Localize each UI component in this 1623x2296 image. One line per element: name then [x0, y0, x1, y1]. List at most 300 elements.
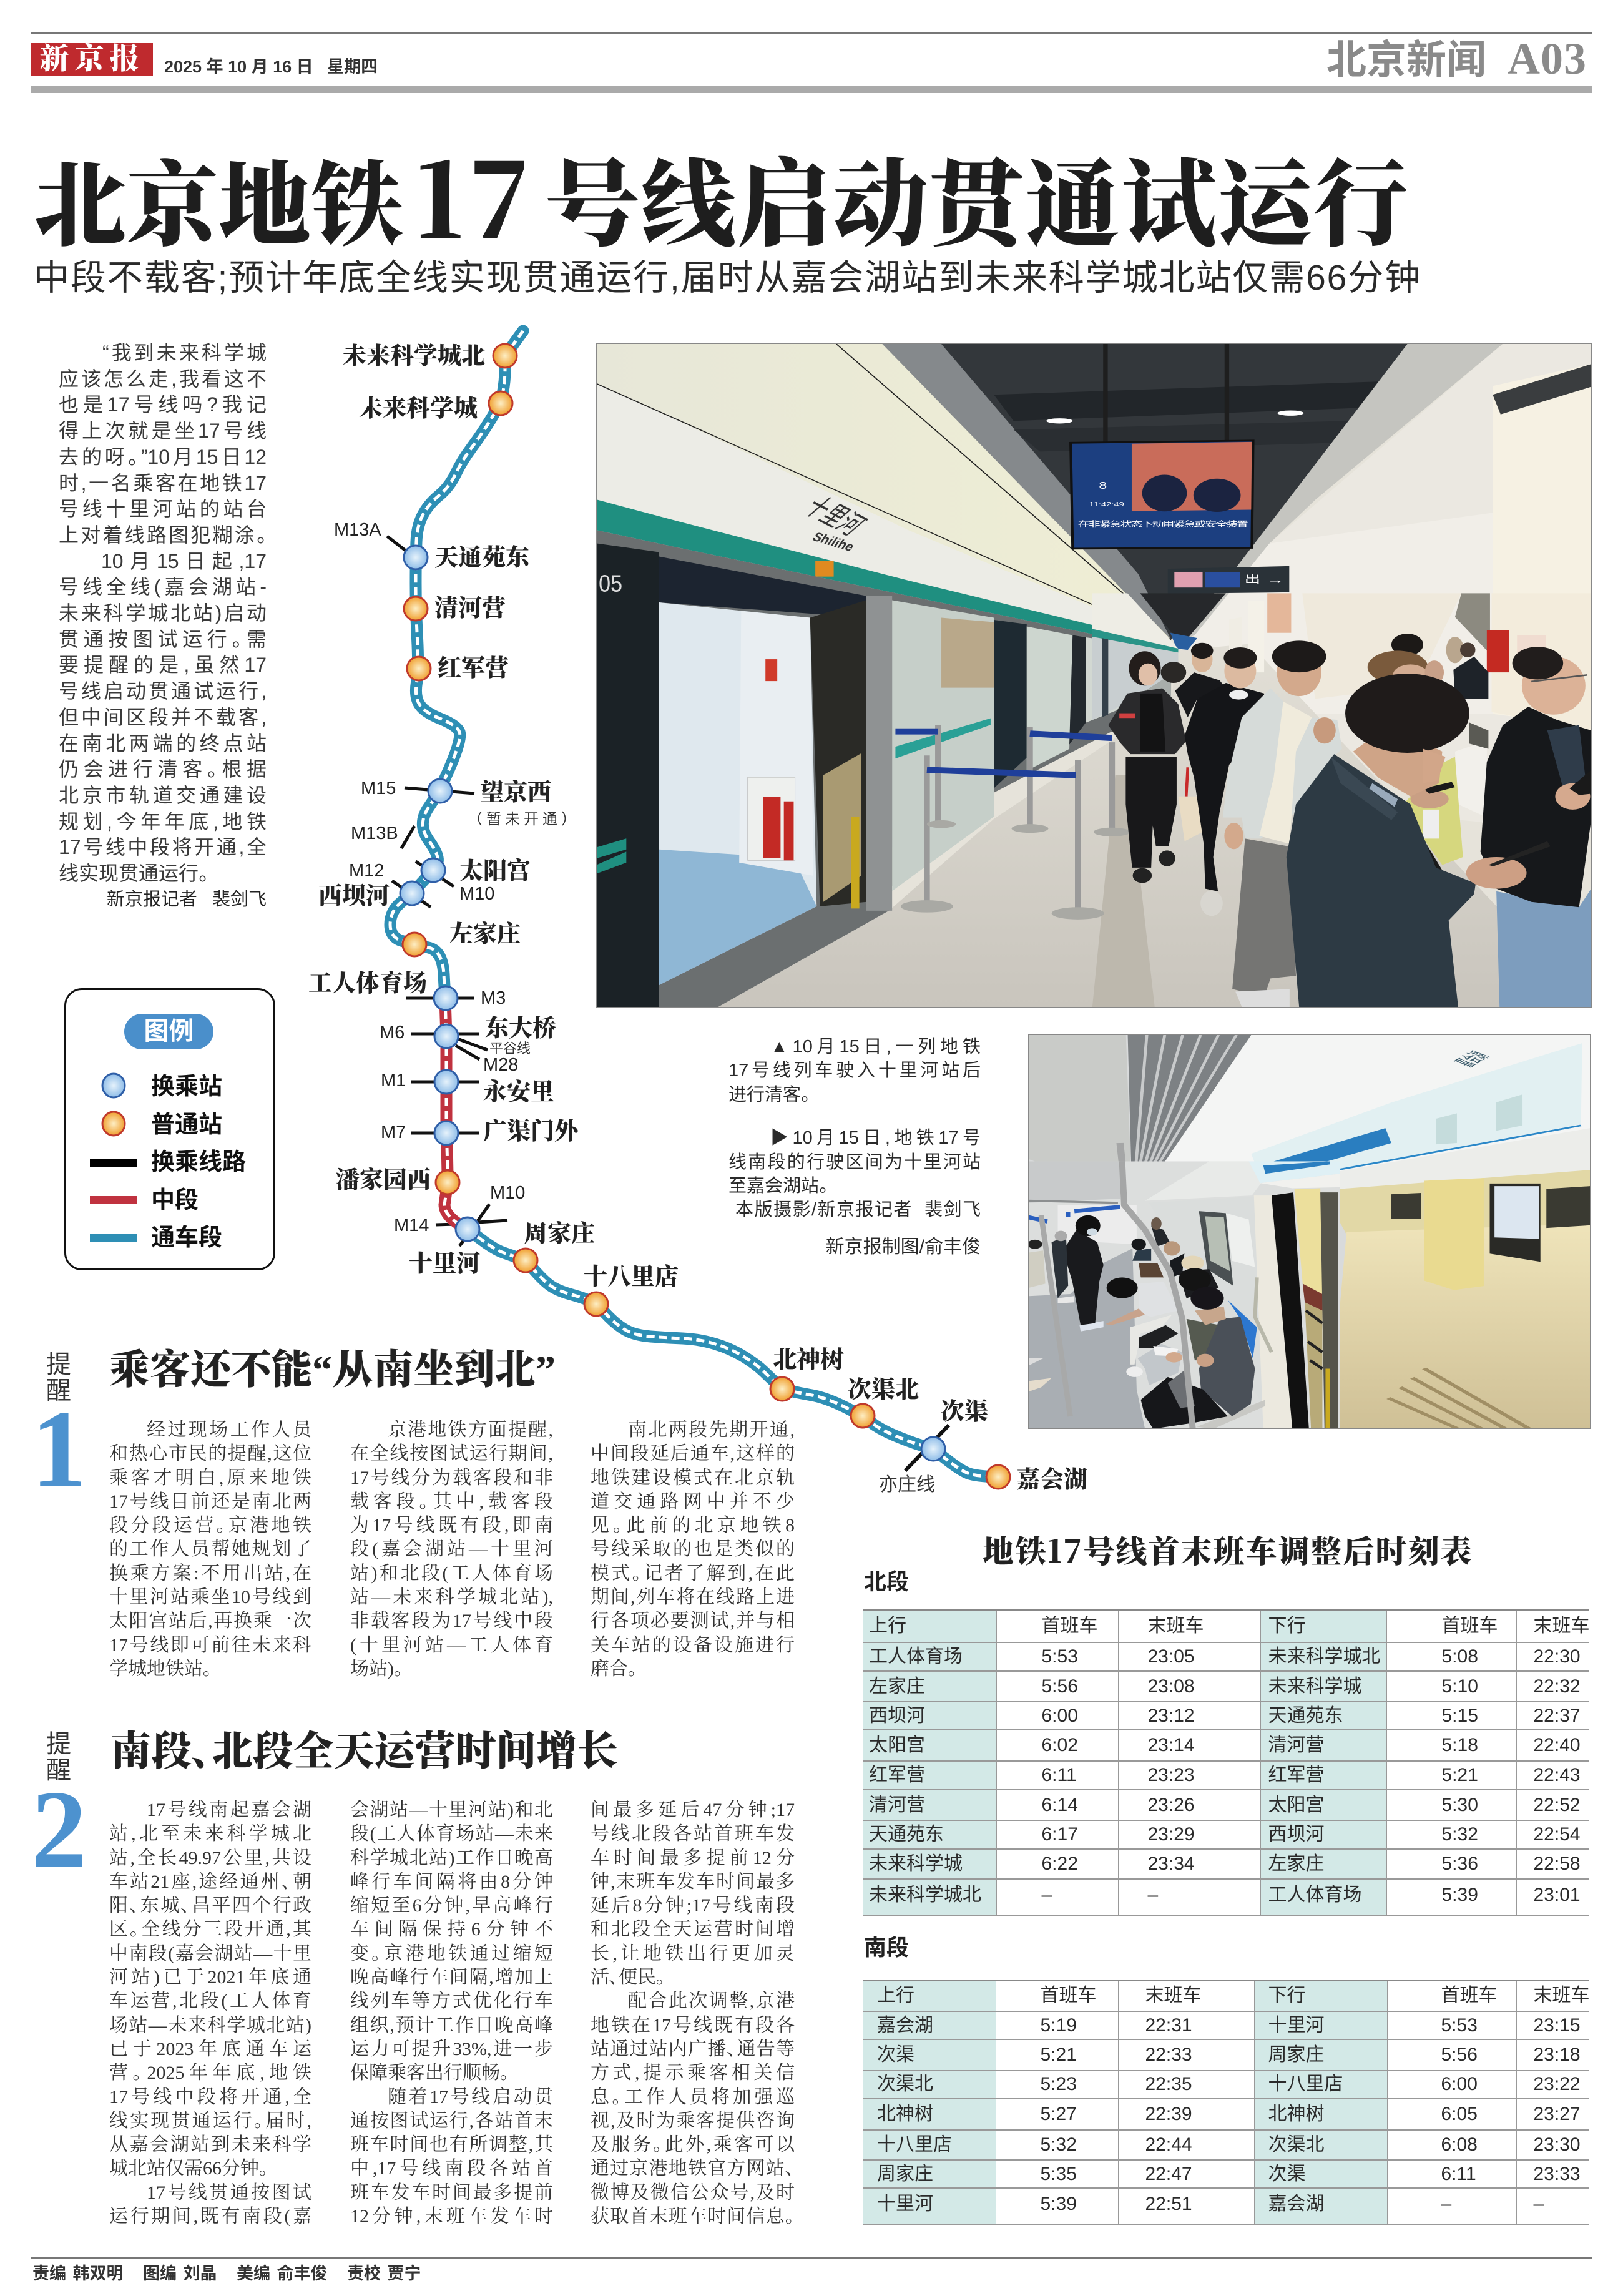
reminder 1 column 1: 17号线目前还是南北两: [109, 1491, 311, 1512]
reminder 1 column 3: 中间段延后通车,这样的: [591, 1443, 795, 1464]
south section timetable: 5:19: [1040, 2015, 1077, 2035]
station wall: 十里河: [795, 487, 878, 542]
carriage interior: [1029, 1161, 1340, 1428]
footer credits: 责编 韩双明 图编 刘晶 美编 俞丰俊 责校 贾宁: [32, 2264, 421, 2283]
standing passenger: [1063, 1215, 1104, 1332]
north section timetable: 6:02: [1041, 1735, 1078, 1755]
north section timetable: 22:30: [1533, 1646, 1581, 1667]
information screen: 11:42:49: [1089, 501, 1124, 508]
south section timetable: 6:00: [1441, 2074, 1478, 2094]
intro text block: 新京报记者 裴剑飞: [107, 890, 267, 910]
line labels: M10: [490, 1183, 525, 1203]
north section timetable: 5:53: [1041, 1646, 1078, 1667]
reminder 2 column 3: 配合此次调整,京港: [628, 1991, 795, 2011]
reminder 2 column 1: 17号线贯通按图试: [147, 2182, 311, 2203]
station names: 东大桥: [485, 1016, 556, 1042]
reminder 1 column 3: [591, 1420, 795, 1679]
south section timetable: 次渠: [877, 2044, 914, 2065]
reminder 2 column 2: 班车时间也有所调整,其: [350, 2134, 553, 2155]
platform view: [1323, 1170, 1590, 1428]
south section timetable: 5:27: [1040, 2104, 1077, 2124]
route display: [1251, 1043, 1582, 1184]
reminder 2 column 2: 车间隔保持6分钟不: [350, 1919, 553, 1940]
date line: 2025 年 10 月 16 日 星期四: [164, 57, 378, 76]
reminder 2 column 1: 区。全线分三段开通,其: [109, 1919, 311, 1940]
station names: 嘉会湖: [1016, 1467, 1087, 1493]
north section timetable: 5:30: [1442, 1794, 1478, 1815]
station names: 周家庄: [524, 1220, 595, 1247]
right wall and column: [1184, 344, 1591, 832]
legend labels: 换乘线路: [151, 1149, 246, 1175]
north section timetable: 末班车: [1147, 1616, 1204, 1636]
man behind: [1175, 643, 1226, 717]
north section timetable: 22:40: [1533, 1735, 1581, 1755]
reminder 2 column 2: 12分钟,末班车发车时: [350, 2206, 553, 2227]
regular stations: [403, 344, 1010, 1489]
reminder 2 column 3: 钟,末班车发车时间最多: [591, 1872, 795, 1892]
north section timetable: 22:32: [1533, 1675, 1581, 1697]
south section timetable: 23:22: [1533, 2074, 1581, 2094]
south section timetable: [863, 1980, 1589, 2225]
transfer stations: [400, 546, 945, 1461]
reminder 2 column 1: 营。2025年年底,地铁: [109, 2063, 311, 2083]
north section timetable: 5:18: [1442, 1735, 1478, 1755]
reminder 2 column 1: 中南段(嘉会湖站—十里: [109, 1943, 311, 1964]
south section timetable: 5:35: [1040, 2164, 1077, 2184]
north section timetable: 23:01: [1533, 1885, 1581, 1905]
north section timetable: 未来科学城北: [1268, 1646, 1381, 1667]
north section timetable: 6:00: [1041, 1705, 1078, 1725]
station names: 未来科学城: [359, 396, 478, 422]
reminder 1 column 3: 地铁建设模式在北京轨: [591, 1468, 795, 1488]
south section timetable: –: [1533, 2194, 1544, 2214]
woman in leather jacket: [1108, 651, 1186, 883]
exit sign: 出: [1245, 571, 1260, 586]
intro text block: 但中间区段并不载客,: [59, 706, 267, 729]
reminder 2 column 3: 和北段全天运营时间增: [591, 1919, 795, 1940]
south section timetable: 6:08: [1441, 2134, 1478, 2155]
reminder 1 column 2: 段(嘉会湖站—十里河: [350, 1539, 553, 1559]
footer rule: [31, 2257, 1592, 2259]
south section timetable: 十八里店: [877, 2134, 952, 2155]
south section timetable: 首班车: [1040, 1985, 1096, 2006]
intro text block: 号线十里河站的站台: [59, 498, 267, 520]
information screen: 8: [1099, 481, 1107, 491]
northern operating section: [390, 331, 523, 998]
reminder 1 column 2: 非载客段为17号线中段: [350, 1611, 553, 1631]
reminder 2 column 3: 微博及微信公众号,及时: [591, 2182, 795, 2203]
north section timetable: 红军营: [869, 1765, 925, 1785]
north section timetable: 5:36: [1442, 1853, 1478, 1874]
reminder 2 column 2: 中,17号线南段各站首: [350, 2158, 553, 2179]
person in yellow jacket: [1368, 650, 1463, 873]
legend labels: 通车段: [151, 1225, 222, 1251]
reminder 1 column 3: 见。此前的北京地铁8: [591, 1515, 795, 1536]
north section timetable: 工人体育场: [1268, 1885, 1362, 1905]
small notes: [468, 811, 935, 1495]
reminder 2 column 2: 组织,预计工作日晚高峰: [350, 2015, 553, 2036]
station names: 永安里: [483, 1079, 554, 1106]
reminder 2 column 1: [109, 1800, 311, 2227]
ceiling: [882, 344, 1503, 644]
reminder 1 column 1: 十里河站乘坐10号线到: [109, 1587, 311, 1607]
intro text block: 去的呀。”10月15日12: [59, 446, 267, 468]
intro text block: 应该怎么走,我看这不: [59, 368, 267, 390]
north section timetable: 未来科学城北: [869, 1885, 981, 1905]
captions and credits: 至嘉会湖站。: [728, 1176, 828, 1196]
south section timetable: 次渠北: [877, 2074, 933, 2094]
newspaper logo: 新京报: [40, 43, 145, 76]
station names: 红军营: [438, 655, 509, 682]
reminder 2 rule: [46, 1872, 72, 2226]
transfer lines: [387, 536, 949, 1471]
station names: 天通苑东: [434, 545, 532, 571]
reminder 1 column 1: 乘客才明白,原来地铁: [109, 1468, 311, 1488]
captions and credits: ▶10月15日,地铁17号: [770, 1128, 981, 1148]
information screen: 在非紧急状态下动用紧急或安全装置: [1078, 518, 1248, 529]
platform screen doors: 05: [599, 570, 622, 597]
north section timetable: 红军营: [1268, 1765, 1325, 1785]
grab poles: [1122, 1161, 1193, 1429]
south section timetable: 十里河: [877, 2194, 933, 2214]
header band: [31, 86, 1592, 93]
reminder 2 column 2: 通按图试运行,各站首末: [350, 2111, 553, 2131]
north section timetable: 太阳宫: [869, 1735, 925, 1755]
south section timetable: 22:39: [1145, 2104, 1192, 2124]
north section timetable: 太阳宫: [1268, 1794, 1325, 1815]
front man using phone: [1287, 674, 1551, 1007]
north section timetable: 末班车: [1533, 1616, 1589, 1636]
north section timetable: 5:21: [1442, 1765, 1478, 1785]
north section timetable: 5:08: [1442, 1646, 1478, 1667]
reminder 2 column 3: 视,及时为乘客提供咨询: [591, 2111, 795, 2131]
north section timetable: 5:32: [1442, 1824, 1478, 1845]
south section timetable: 23:30: [1533, 2134, 1581, 2155]
station names: 广渠门外: [483, 1118, 581, 1145]
middle section: [444, 998, 468, 1229]
background people: [1160, 634, 1488, 699]
man in black jacket with bag: [1178, 647, 1264, 916]
north section timetable: 22:58: [1533, 1853, 1581, 1874]
south section timetable: 6:05: [1441, 2104, 1478, 2124]
station names: 工人体育场: [308, 971, 427, 997]
south section timetable: 22:35: [1145, 2074, 1192, 2094]
small notes: （暂未开通）: [468, 811, 580, 828]
captions and credits: 17号线列车驶入十里河站后: [728, 1061, 981, 1081]
reminder 1 column 3: 模式。记者了解到,在此: [591, 1563, 795, 1584]
platform backdrop: [1092, 593, 1591, 818]
intro text block: 规划,今年年底,地铁: [59, 810, 267, 833]
north section timetable: 23:14: [1147, 1735, 1195, 1755]
south section timetable: 末班车: [1145, 1985, 1201, 2006]
reminder 2 column 2: 段(工人体育场站—未来: [350, 1823, 553, 1844]
intro text block: 线实现贯通运行。: [59, 862, 208, 885]
left seated passengers: [1027, 1231, 1074, 1391]
station names: 西坝河: [318, 883, 390, 910]
north section timetable: 西坝河: [1268, 1824, 1325, 1845]
small notes: 平谷线: [489, 1041, 531, 1056]
intro text block: 得上次就是坐17号线: [59, 419, 267, 442]
reminder 1 label: 提醒: [46, 1351, 71, 1405]
reminder 2 column 1: 车运营,北段(工人体育: [109, 1991, 311, 2011]
south section timetable: 周家庄: [877, 2164, 933, 2184]
north section label: 北段: [864, 1569, 909, 1594]
north section timetable: 上行: [869, 1616, 906, 1636]
station wall: Shilihe: [810, 530, 857, 554]
north section timetable: 天通苑东: [869, 1824, 944, 1845]
intro text block: 17号线中段将开通,全: [59, 836, 267, 858]
line labels: M7: [381, 1122, 406, 1142]
south section timetable: 5:53: [1441, 2015, 1478, 2035]
reminder 2 column 3: [591, 1800, 795, 2227]
station names: 未来科学城北: [343, 343, 485, 370]
reminder 2 column 1: 线实现贯通运行。届时,: [109, 2111, 311, 2131]
south section timetable: 末班车: [1533, 1985, 1589, 2006]
reminder 2 column 2: 班车发车时间最多提前: [350, 2182, 553, 2203]
intro text block: 仍会进行清客。根据: [59, 758, 267, 780]
intro text block: 在南北两端的终点站: [59, 732, 267, 755]
north section timetable: 下行: [1268, 1616, 1306, 1636]
north section timetable: 6:22: [1041, 1853, 1078, 1874]
reminder 1 column 3: 号线采取的也是类似的: [591, 1539, 795, 1559]
south section timetable: 十里河: [1268, 2015, 1325, 2035]
reminder 2 column 2: [350, 1800, 553, 2227]
young man in pale jacket: [1223, 640, 1342, 1007]
reminder 1 column 2: 载客段。其中,载客段: [350, 1491, 553, 1512]
south section timetable: 23:18: [1533, 2044, 1581, 2065]
north section timetable: 22:52: [1533, 1794, 1581, 1815]
reminder 2 column 2: 运力可提升33%,进一步: [350, 2039, 553, 2059]
reminder 2 column 1: 场站—未来科学城北站): [109, 2015, 311, 2036]
reminder 1 column 2: 站—未来科学城北站),: [350, 1587, 553, 1607]
south section timetable: 次渠北: [1268, 2134, 1325, 2155]
captions and credits: [728, 1037, 981, 1257]
line labels: M3: [481, 988, 506, 1008]
north section timetable: –: [1147, 1885, 1158, 1905]
intro text block: 号线全线(嘉会湖站-: [59, 576, 267, 598]
south section timetable: 北神树: [1268, 2104, 1325, 2124]
reminder 2 column 3: 延后8分钟;17号线南段: [591, 1895, 795, 1916]
station names: 北神树: [773, 1347, 844, 1373]
intro text block: 时,一名乘客在地铁17: [59, 472, 267, 494]
reminder 2 column 1: 站,全长49.97公里,共设: [109, 1848, 311, 1868]
reminder 1 heading: 乘客还不能“从南坐到北”: [109, 1348, 556, 1393]
south section timetable: 5:32: [1040, 2134, 1077, 2155]
north section timetable: 清河营: [1268, 1735, 1325, 1755]
reminder 1 column 1: [109, 1420, 311, 1679]
intro text block: 号线启动贯通试运行,: [59, 680, 267, 702]
legend labels: 换乘站: [151, 1074, 222, 1100]
line labels: M13A: [334, 520, 381, 540]
north section timetable: 23:26: [1147, 1794, 1195, 1815]
reminder 2 column 1: 车站21座,途经通州、朝: [109, 1872, 311, 1892]
reminder 1 column 3: 行各项必要测试,并与相: [591, 1611, 795, 1631]
station names: 清河营: [434, 596, 506, 622]
reminder 2 column 3: 活、便民。: [591, 1967, 665, 1988]
reminder 2 column 2: 保障乘客出行顺畅。: [350, 2063, 509, 2083]
reminder 2 column 1: 运行期间,既有南段(嘉: [109, 2206, 311, 2227]
reminder 2 column 3: 通过京港地铁官方网站、: [591, 2158, 795, 2179]
reminder 1 column 1: 换乘方案:不用出站,在: [109, 1563, 311, 1584]
timetable title: 地铁17号线首末班车调整后时刻表: [983, 1527, 1473, 1572]
exit sign: [1168, 566, 1289, 594]
reminder 1 column 2: 在全线按图试运行期间,: [350, 1443, 553, 1464]
legend labels: 中段: [151, 1187, 199, 1214]
reminder 1 column 2: 场站)。: [350, 1659, 403, 1679]
station names: 十八里店: [584, 1264, 679, 1290]
reminder 2 column 3: 站通过站内广播、通告等: [591, 2039, 795, 2059]
reminder 1 column 1: 和热心市民的提醒,这位: [109, 1443, 311, 1464]
carriage shell: [1029, 1161, 1340, 1429]
station wall: [597, 344, 1171, 650]
reminder 1 column 2: [350, 1420, 553, 1679]
south section timetable: –: [1441, 2194, 1451, 2214]
south section label: 南段: [864, 1935, 909, 1960]
station names: 次渠北: [848, 1376, 919, 1403]
legend labels: 普通站: [151, 1111, 222, 1137]
south section timetable: 6:11: [1441, 2164, 1476, 2184]
north section timetable: 22:54: [1533, 1824, 1581, 1845]
north section timetable: 工人体育场: [869, 1646, 963, 1667]
passengers on the platform: [1092, 593, 1591, 1007]
reminder 2 heading: 南段、北段全天运营时间增长: [110, 1729, 618, 1774]
south section timetable: 周家庄: [1268, 2044, 1325, 2065]
north section timetable: 5:39: [1442, 1885, 1478, 1905]
exit sign: →: [1267, 573, 1284, 586]
north section timetable: 首班车: [1442, 1616, 1498, 1636]
reminder 2 column 1: 已于2023年底通车运: [109, 2039, 311, 2059]
north section timetable: 5:56: [1041, 1675, 1078, 1697]
intro text block: 要提醒的是,虽然17: [59, 654, 267, 676]
reminder 2 column 1: 河站)已于2021年底通: [109, 1967, 311, 1988]
north section timetable: 清河营: [869, 1794, 925, 1815]
top rule: [31, 32, 1592, 34]
south section timetable: 22:31: [1145, 2015, 1192, 2035]
photo: train interior: [1028, 1034, 1591, 1429]
north section timetable: 未来科学城: [1268, 1675, 1362, 1697]
north section timetable: 23:08: [1147, 1675, 1195, 1697]
intro text block: “我到未来科学城: [102, 341, 267, 364]
north section timetable: 22:43: [1533, 1765, 1581, 1785]
north section timetable: 23:23: [1147, 1765, 1195, 1785]
route display: 嘉会湖: [1444, 1047, 1496, 1070]
reminder 1 rule: [46, 1491, 72, 1729]
reminder 2 column 3: 地铁在17号线既有段各: [591, 2015, 795, 2036]
reminder 2 column 1: 阳、东城、昌平四个行政: [109, 1895, 311, 1916]
reminder 2 column 1: 城北站仅需66分钟。: [109, 2158, 268, 2179]
reminder 2 column 2: 会湖站—十里河站)和北: [350, 1800, 553, 1820]
reminder 2 column 2: 峰行车间隔将由8分钟: [350, 1872, 553, 1892]
seated passengers near end: [1106, 1256, 1257, 1429]
north section timetable: 首班车: [1041, 1616, 1097, 1636]
north section timetable: 左家庄: [869, 1675, 925, 1697]
photo: Shilihe platform: [596, 343, 1592, 1008]
reminder 2 column 1: 17号线中段将开通,全: [109, 2087, 311, 2107]
line labels: M10: [459, 884, 494, 904]
north section timetable: 左家庄: [1268, 1853, 1325, 1874]
north section timetable: –: [1041, 1885, 1052, 1905]
legend title badge: [124, 1014, 213, 1049]
intro text block: 未来科学城北站)启动: [59, 602, 267, 624]
line labels: M15: [361, 778, 396, 798]
south section timetable: 十八里店: [1268, 2074, 1343, 2094]
reminder 1 column 2: 为17号线既有段,即南: [350, 1515, 553, 1536]
reminder 1 column 3: 磨合。: [591, 1659, 637, 1679]
line labels: [334, 520, 525, 1235]
legend panel: [64, 988, 275, 1270]
intro text block: 贯通按图试运行。需: [59, 628, 267, 650]
captions and credits: 进行清客。: [728, 1085, 810, 1105]
north section timetable: 天通苑东: [1268, 1705, 1343, 1725]
line labels: M14: [394, 1215, 429, 1235]
south section timetable: 23:33: [1533, 2164, 1581, 2184]
reminder 1 column 3: 关车站的设备设施进行: [591, 1635, 795, 1656]
north section timetable: 23:34: [1147, 1853, 1195, 1874]
reminder 2 column 2: 晚高峰行车间隔,增加上: [350, 1967, 553, 1988]
south section timetable: 22:33: [1145, 2044, 1192, 2065]
southern operating section: [468, 1229, 998, 1477]
metro line map: [308, 325, 1087, 1495]
reminder 2 column 3: 间最多延后47分钟;17: [591, 1800, 795, 1820]
platform screen doors: [597, 530, 1171, 1007]
station names: 潘家园西: [336, 1167, 431, 1194]
north section timetable: 5:15: [1442, 1705, 1478, 1725]
door frame and platform gap: [1197, 1189, 1338, 1429]
line labels: M12: [349, 861, 384, 881]
station names: 太阳宫: [459, 858, 531, 885]
south section timetable: 5:56: [1441, 2044, 1478, 2065]
reminder 2 column 3: 长,让地铁出行更加灵: [591, 1943, 795, 1964]
reminder 1 column 3: 道交通路网中并不少: [591, 1491, 795, 1512]
south section timetable: 嘉会湖: [1268, 2194, 1325, 2214]
reminder 2 label: 提醒: [46, 1730, 71, 1784]
south section timetable: 5:21: [1040, 2044, 1077, 2065]
carriage ceiling and wall: [1029, 1035, 1590, 1200]
reminder 2 column 3: 获取首末班车时间信息。: [591, 2206, 795, 2227]
reminder 2 column 3: 及服务。此外,乘客可以: [591, 2134, 795, 2155]
captions and credits: ▲10月15日,一列地铁: [770, 1037, 981, 1057]
north section timetable: 未来科学城: [869, 1853, 963, 1874]
station names: 次渠: [941, 1398, 988, 1425]
north section timetable: 6:17: [1041, 1824, 1078, 1845]
title: 北京地铁17号线启动贯通试运行: [34, 120, 1410, 268]
line labels: M28: [483, 1055, 518, 1075]
north section timetable: 6:14: [1041, 1794, 1078, 1815]
reminder 1 column 2: 站)和北段(工人体育场: [350, 1563, 553, 1584]
reminder 2 column 1: 17号线南起嘉会湖: [147, 1800, 311, 1820]
reminder 2 column 2: 线列车等方式优化行车: [350, 1991, 553, 2011]
stanchions: [895, 725, 1112, 913]
reminder 2 column 2: 变。京港地铁通过缩短: [350, 1943, 553, 1964]
north section timetable: 西坝河: [869, 1705, 925, 1725]
south section timetable: 嘉会湖: [877, 2015, 933, 2035]
south section timetable: 22:47: [1145, 2164, 1192, 2184]
reminder 1 column 2: 京港地铁方面提醒,: [388, 1420, 553, 1440]
reminder 2 numeral: 2: [31, 1767, 87, 1891]
intro text block: 也是17号线吗?我记: [59, 393, 267, 416]
floor: [718, 644, 1591, 1007]
intro text block: 北京市轨道交通建设: [59, 784, 267, 807]
legend swatches: [90, 1072, 137, 1242]
reminder 2 column 3: 息。工作人员将加强巡: [591, 2087, 795, 2107]
line labels: M13B: [351, 823, 398, 843]
reminder 1 column 1: 学城地铁站。: [109, 1659, 212, 1679]
reminder 1 column 3: 期间,列车将在线路上进: [591, 1587, 795, 1607]
intro text block: 上对着线路图犯糊涂。: [59, 524, 267, 546]
south section timetable: 上行: [877, 1985, 914, 2006]
reminder 1 column 1: 的工作人员帮她规划了: [109, 1539, 311, 1559]
reminder 1 column 1: 17号线即可前往未来科: [109, 1635, 311, 1656]
